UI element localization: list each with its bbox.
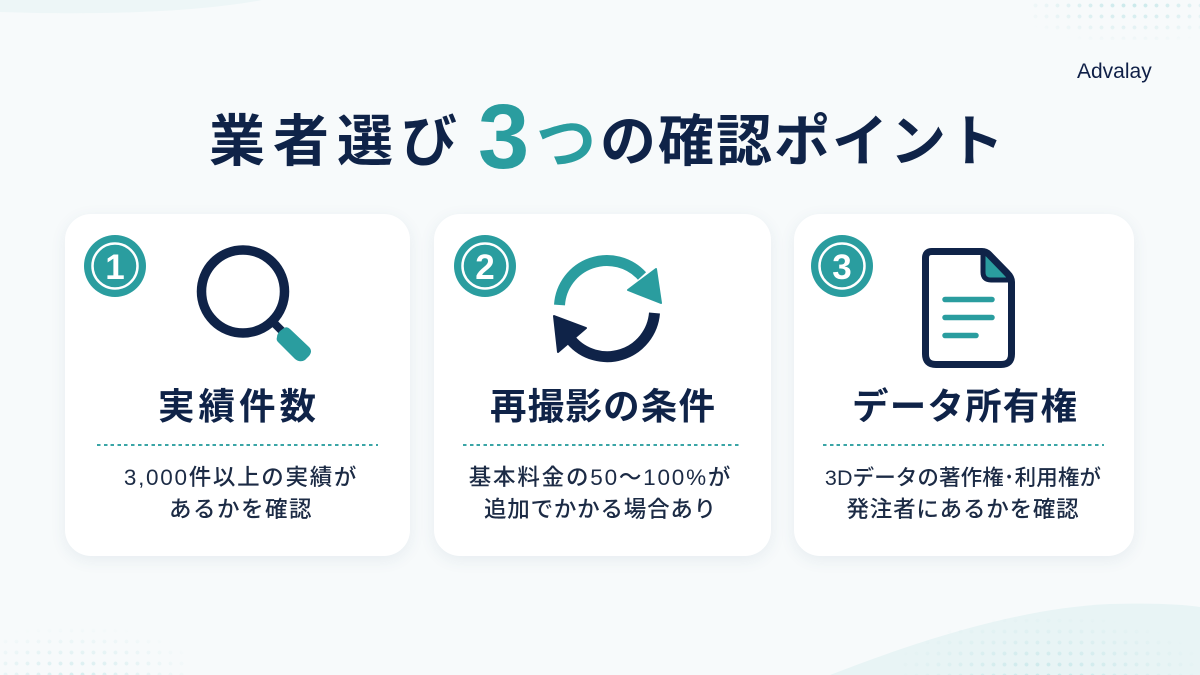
- card 1 heading: 実績件数: [158, 386, 320, 427]
- title: の確認ポイント: [600, 110, 1006, 173]
- background dots: top right: [1034, 4, 1200, 30]
- card 3 text: 3Dデータの著作権･利用権が: [825, 466, 1101, 490]
- title: [209, 86, 1006, 188]
- card 1 text: [124, 465, 358, 522]
- card 3 text: 発注者にあるかを確認: [846, 497, 1080, 522]
- card 3 heading: データ所有権: [852, 386, 1078, 427]
- badge 1: 1: [105, 248, 125, 287]
- badge 3: 3: [832, 248, 852, 287]
- badge 2: 2: [475, 248, 495, 287]
- title: つ: [536, 110, 596, 177]
- card 2 text: 基本料金の50～100%が: [469, 465, 732, 490]
- title: 業者選び: [209, 110, 465, 173]
- background dots: bottom right: [937, 631, 1160, 675]
- card 2 text: 追加でかかる場合あり: [484, 497, 717, 522]
- panel: card 3: [796, 541, 1132, 560]
- card 2 text: [469, 465, 732, 522]
- card 2 heading: 再撮影の条件: [490, 386, 716, 427]
- panel: card 1: [67, 541, 408, 560]
- background dots: bottom left: [4, 640, 172, 675]
- logo: Advalay: [1077, 60, 1152, 83]
- panel: card 2: [436, 541, 769, 560]
- card 1 text: 3,000件以上の実績が: [124, 465, 358, 490]
- card 1 text: あるかを確認: [169, 497, 313, 522]
- title: 3: [478, 86, 529, 188]
- card 3 text: [825, 466, 1101, 522]
